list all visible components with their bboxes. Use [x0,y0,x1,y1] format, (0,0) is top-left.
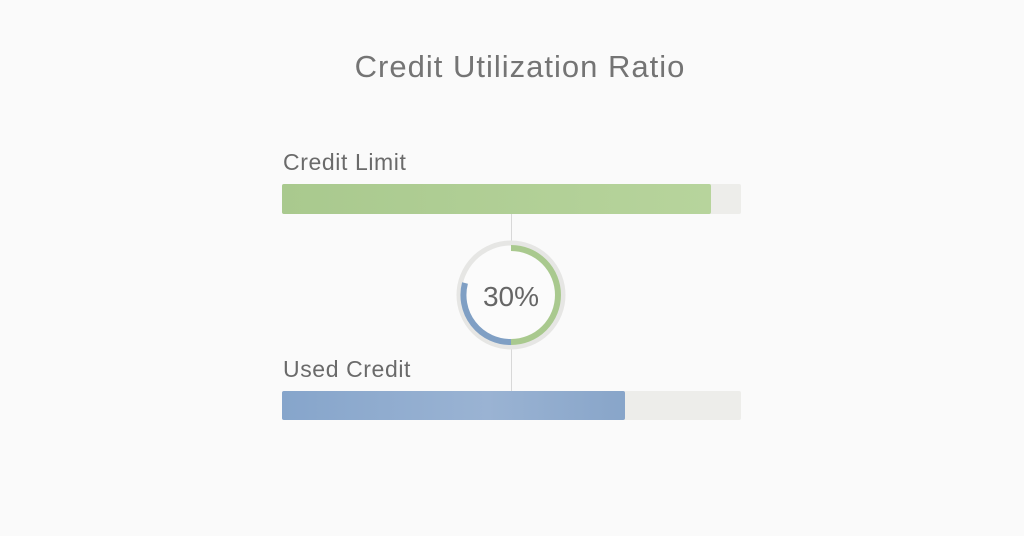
label: used credit: Used Credit [283,356,411,382]
label: credit limit: Credit Limit [283,149,407,175]
connector line [511,214,512,391]
bar: credit limit [282,184,741,214]
bar: used credit [282,391,741,420]
donut chart [456,240,566,350]
title: Credit Utilization Ratio [355,49,685,84]
donut chart: 30% [483,281,539,312]
